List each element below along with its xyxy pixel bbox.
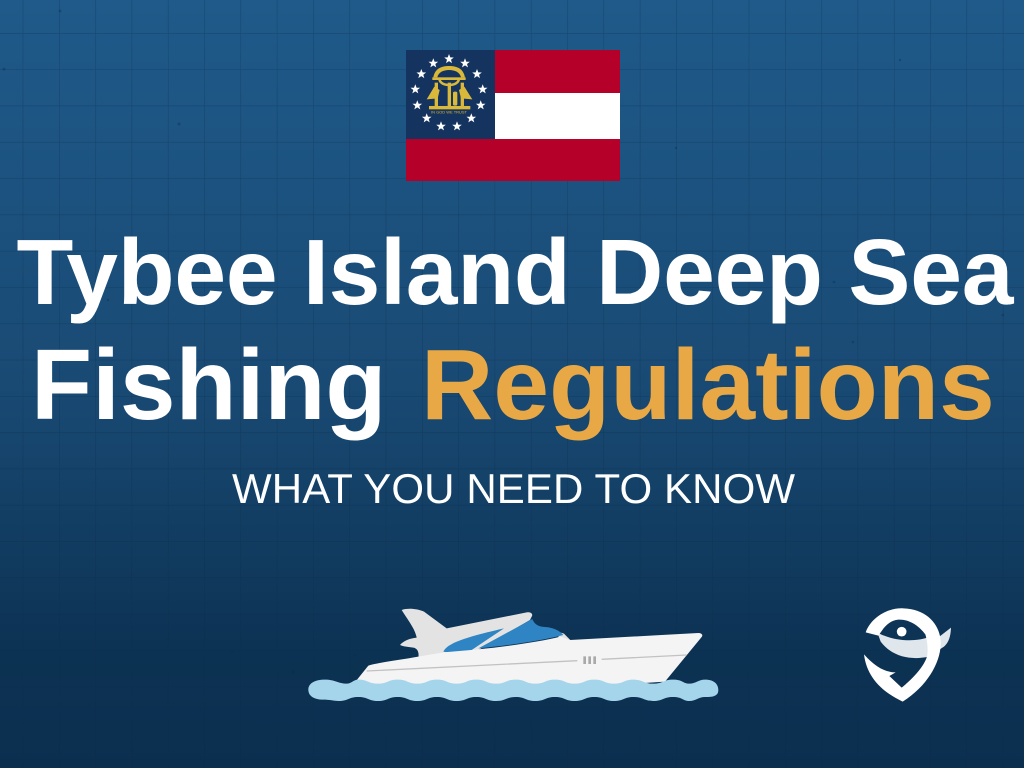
water waves bbox=[308, 680, 718, 701]
title line 2: Fishing bbox=[31, 329, 387, 441]
flag stars bbox=[410, 54, 488, 130]
logo eye bbox=[897, 627, 906, 636]
icon: Georgia state flag bbox=[406, 50, 620, 181]
title line 1: Tybee Island Deep Sea bbox=[16, 220, 1015, 324]
logo tail and band bbox=[877, 628, 951, 658]
flag seal: gold arch and pillars bbox=[427, 66, 472, 114]
icon: yacht on water bbox=[308, 609, 718, 701]
yacht windows bbox=[443, 628, 504, 652]
icon: fish logo bbox=[864, 608, 951, 702]
title line 2: Regulations bbox=[421, 329, 995, 441]
hull stripe bbox=[367, 655, 687, 671]
hull vents bbox=[585, 656, 595, 664]
subtitle: WHAT YOU NEED TO KNOW bbox=[232, 465, 795, 512]
logo body bbox=[864, 608, 941, 702]
yacht hull bbox=[356, 633, 702, 690]
flag seal: gold arch and pillars: IN GOD WE TRUST bbox=[431, 110, 468, 114]
yacht superstructure bbox=[400, 609, 532, 658]
